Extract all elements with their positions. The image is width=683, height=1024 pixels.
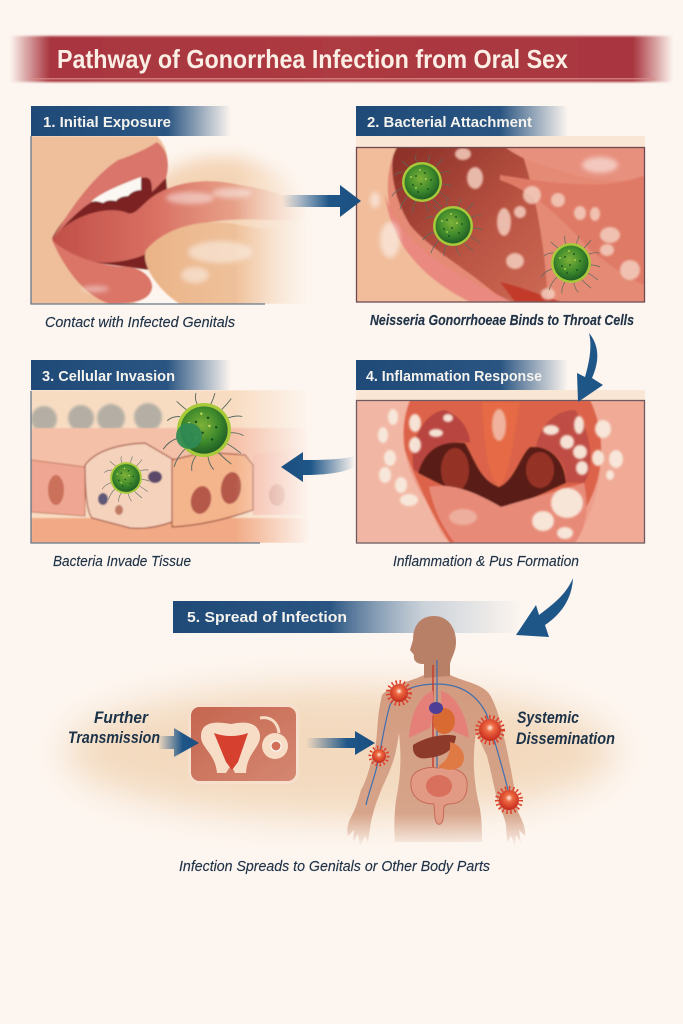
illustration: human body with organs xyxy=(347,616,525,846)
panel: step 3 cellular invasion xyxy=(31,360,311,570)
organ: heart xyxy=(429,702,455,734)
organ: lungs xyxy=(409,691,469,738)
heading: step 3: 3. Cellular Invasion xyxy=(42,368,175,385)
heading: step 4: 4. Inflammation Response xyxy=(366,368,542,385)
caption: step 5: Infection Spreads to Genitals or Other Body Parts xyxy=(179,858,490,875)
heading: step 1: 1. Initial Exposure xyxy=(43,114,171,131)
heading: step 5 xyxy=(173,601,523,633)
arrow: step 4 to 3 xyxy=(281,452,355,482)
caption: step 1: Contact with Infected Genitals xyxy=(45,314,235,331)
heading: step 5: 5. Spread of Infection xyxy=(187,609,347,626)
arrow: to reproductive icon xyxy=(158,728,199,757)
panel: step 4 inflammation response xyxy=(356,360,645,570)
arrow: step 4 to 5 xyxy=(516,578,573,637)
caption: step 3: Bacteria Invade Tissue xyxy=(53,553,191,570)
organ: intestines xyxy=(411,768,467,824)
heading: step 2 xyxy=(356,106,568,136)
label: systemic dissemination xyxy=(516,708,615,748)
panel: step 2 bacterial attachment xyxy=(356,106,645,329)
illustration: bacteria invading cells xyxy=(31,390,311,543)
arrow: step 1 to 2 xyxy=(282,185,361,217)
label: systemic dissemination: Systemic xyxy=(517,708,579,727)
organ: stomach xyxy=(438,742,464,770)
illustration: throat with bacteria xyxy=(356,136,645,302)
arrow: to body xyxy=(306,731,375,755)
head xyxy=(410,616,456,678)
heading: step 4 xyxy=(356,360,568,390)
heading: step 3 xyxy=(31,360,231,390)
title: Pathway of Gonorrhea Infection from Oral Sex xyxy=(57,44,568,74)
panel: step 5 spread of infection xyxy=(65,601,615,875)
caption: step 4: Inflammation & Pus Formation xyxy=(393,553,579,570)
organ: liver xyxy=(413,735,456,758)
background wash xyxy=(65,686,615,818)
infection sites xyxy=(370,682,521,812)
label: further transmission: Transmission xyxy=(68,728,160,747)
icon: reproductive organs xyxy=(190,706,298,782)
arrow: step 2 to 4 xyxy=(577,333,603,402)
label: further transmission xyxy=(68,708,160,747)
label: systemic dissemination: Dissemination xyxy=(516,729,615,748)
heading: step 1 xyxy=(31,106,231,136)
caption: step 2: Neisseria Gonorrhoeae Binds to Throat Cells xyxy=(370,312,634,329)
illustration: mouth contact xyxy=(31,136,310,304)
illustration: inflamed throat xyxy=(356,390,645,543)
vessels xyxy=(366,660,508,805)
heading: step 2: 2. Bacterial Attachment xyxy=(367,114,532,131)
title banner xyxy=(10,36,673,82)
panel: step 1 initial exposure xyxy=(31,106,310,331)
label: further transmission: Further xyxy=(94,708,149,727)
